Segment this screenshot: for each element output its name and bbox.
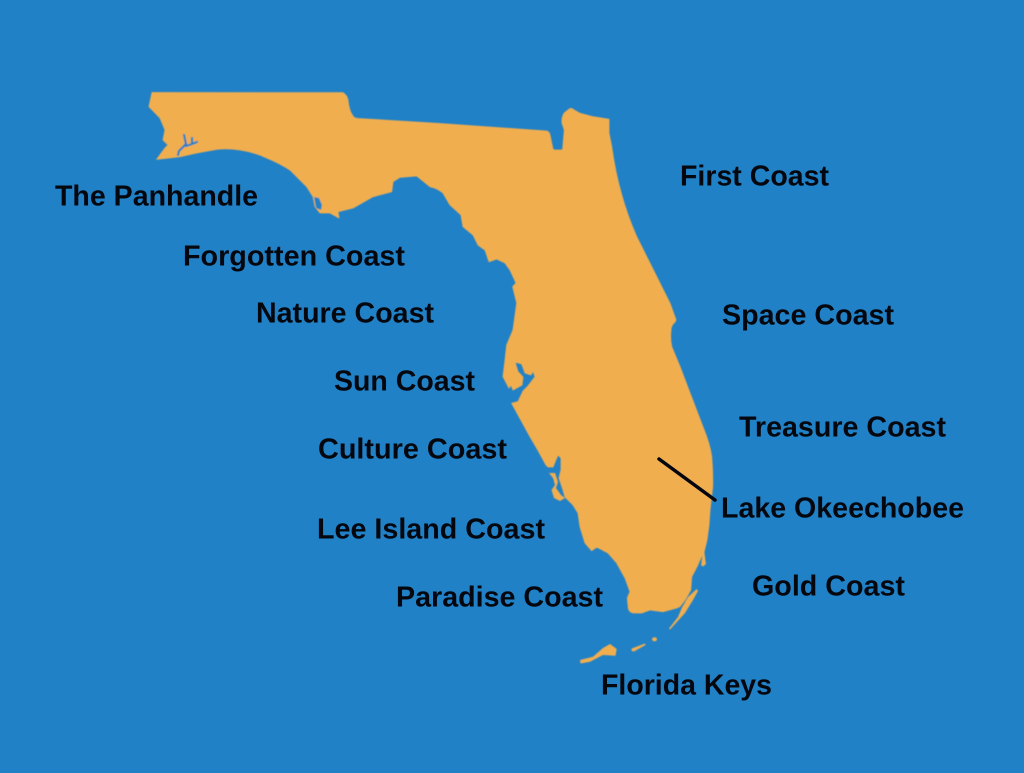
label: Florida Keys: Florida Keys bbox=[601, 670, 772, 702]
label: Sun Coast: Sun Coast bbox=[334, 366, 475, 398]
Middle Keys bbox=[632, 644, 646, 652]
Long Key dot bbox=[652, 637, 657, 641]
label: Paradise Coast: Paradise Coast bbox=[396, 582, 604, 614]
leader line: Lake Okeechobee bbox=[659, 459, 715, 500]
label: Forgotten Coast: Forgotten Coast bbox=[183, 240, 406, 272]
mainland bbox=[149, 92, 713, 613]
label: Nature Coast: Nature Coast bbox=[256, 298, 435, 330]
label: Treasure Coast: Treasure Coast bbox=[739, 412, 947, 444]
Lower Keys bbox=[580, 644, 617, 664]
label: First Coast: First Coast bbox=[680, 160, 829, 192]
Charlotte Harbor barrier island bbox=[549, 473, 565, 501]
label: Space Coast: Space Coast bbox=[722, 300, 895, 332]
Choctawhatchee lagoon bbox=[314, 197, 322, 210]
label: Lake Okeechobee: Lake Okeechobee bbox=[721, 492, 964, 524]
label: The Panhandle: The Panhandle bbox=[55, 180, 258, 212]
label: Gold Coast: Gold Coast bbox=[752, 570, 906, 602]
Biscayne Key Largo bbox=[669, 589, 698, 630]
label: Culture Coast: Culture Coast bbox=[318, 434, 508, 466]
map: Florida landmass bbox=[149, 92, 713, 664]
Pensacola Bay inlet bbox=[178, 135, 197, 155]
label: Lee Island Coast: Lee Island Coast bbox=[317, 514, 546, 546]
